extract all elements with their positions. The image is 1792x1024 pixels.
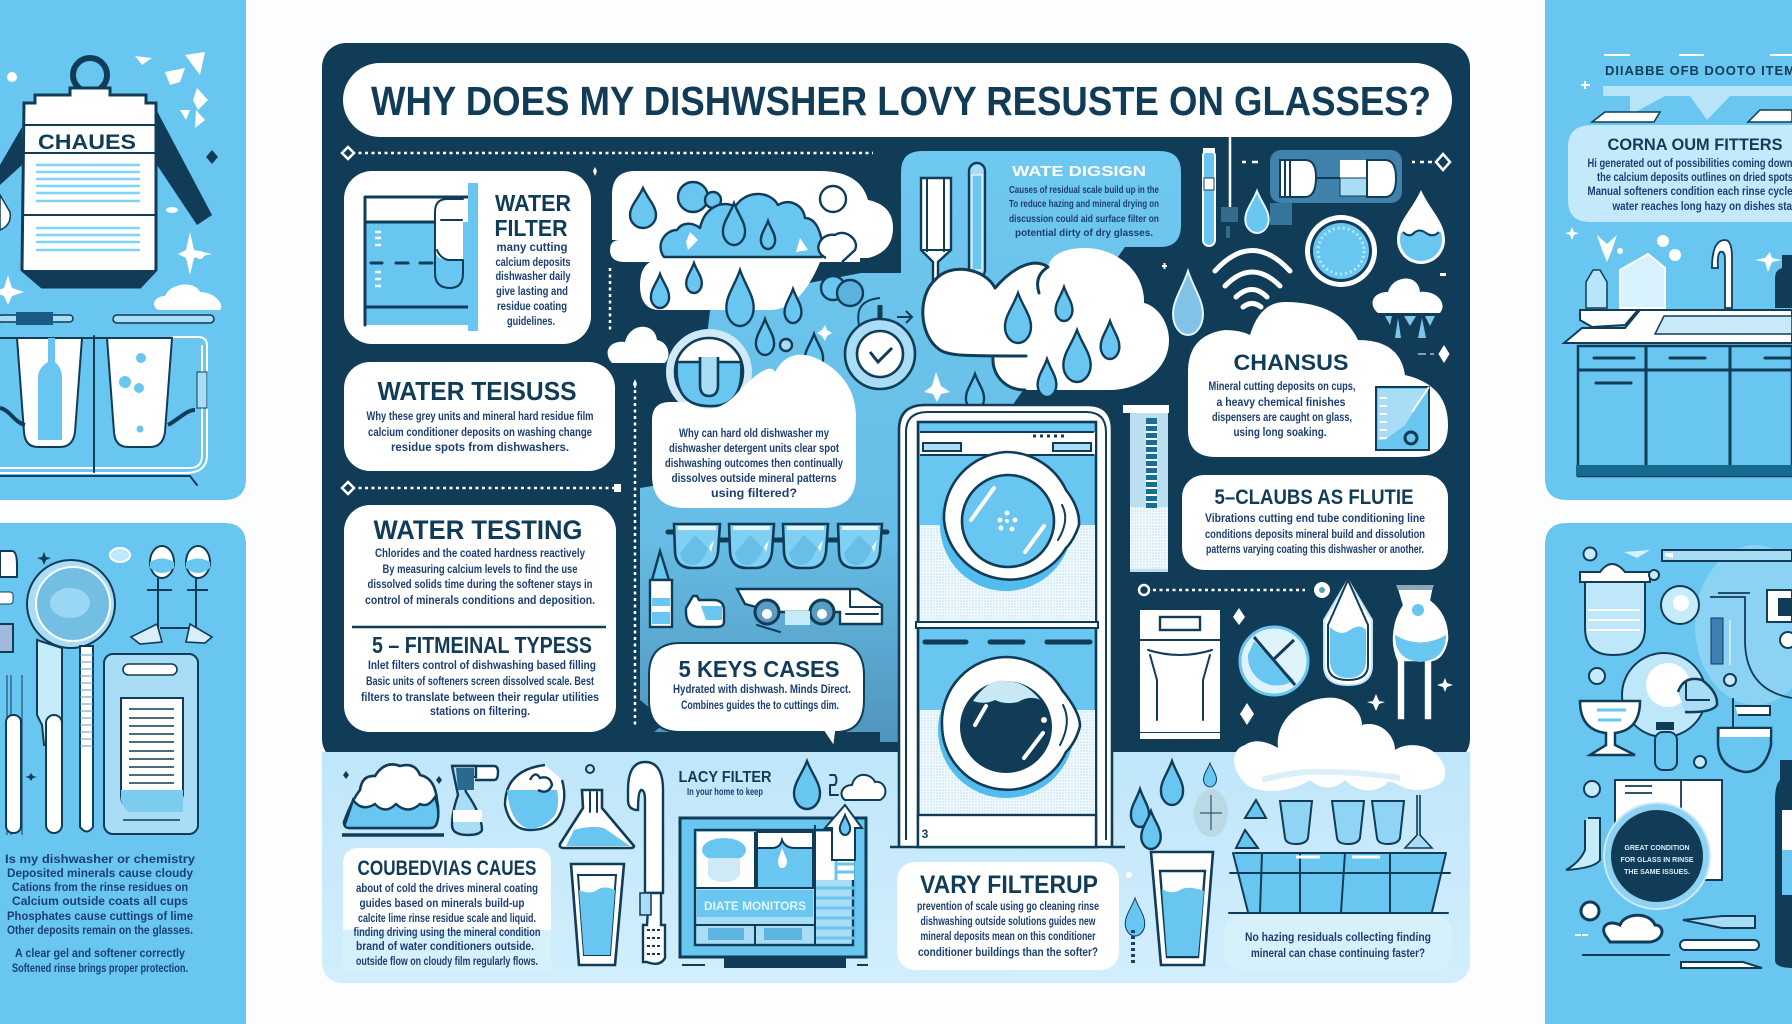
icon: small tap	[686, 596, 724, 627]
heading: chaues: CHAUES	[38, 131, 136, 154]
panel: chansus	[1188, 302, 1448, 457]
panel: vary filterup: prevention of scale using go cleaning rinse	[917, 901, 1099, 913]
icon: goggles	[110, 546, 212, 644]
panel: vary filterup: dishwashing outside solutions guides new	[920, 916, 1096, 928]
panel: 5 keys cases	[649, 643, 864, 747]
panel: water testing and types: dissolved solids time during the softener stays in	[368, 579, 592, 591]
panel: 5-clauses as flutie: conditions deposits mineral build and dissolution	[1205, 529, 1425, 541]
panel: rack note	[1224, 915, 1452, 970]
icon: hose unit box	[1270, 150, 1402, 225]
heading: water filter: FILTER	[494, 215, 568, 241]
panel: 5 keys cases: Combines guides the to cuttings dim.	[681, 700, 839, 712]
icon: bottle	[1775, 760, 1792, 968]
panel: 5-clauses as flutie: 5–CLAUBS AS FLUTIE	[1214, 486, 1414, 509]
panel: chansus: a heavy chemical finishes	[1216, 397, 1346, 409]
panel: question bubble: using filtered?	[711, 488, 797, 500]
icon: loose drops	[1125, 761, 1216, 936]
icon: sparkles lower right	[1233, 608, 1453, 725]
icon: small bottle	[650, 551, 672, 627]
panel: courbedias caues: outside flow on cloudy film regularly flows.	[356, 956, 538, 968]
icon: filter jug	[1580, 548, 1659, 655]
decorative sparkles	[0, 52, 212, 305]
panel: right bottom side card	[1545, 523, 1792, 1024]
icon: hanging ring	[73, 58, 107, 92]
icon: shelf funnels	[1592, 86, 1792, 122]
icon: sleeves behind clipboard	[0, 111, 212, 225]
panel: water design: Causes of residual scale build up in the	[1009, 184, 1159, 196]
panel: 5-clauses as flutie: patterns varying coating this dishwasher or another.	[1206, 544, 1424, 556]
heading: water filter: WATER	[495, 190, 571, 216]
text block: left explanation: Deposited minerals cause cloudy	[7, 868, 194, 880]
text block: left explanation: Softened rinse brings proper protection.	[12, 963, 188, 975]
panel: water teisuss: WATER TEISUSS	[378, 376, 576, 406]
icon: stemmed bowl	[1580, 701, 1640, 755]
panel: question bubble: dishwashing outcomes then continually	[665, 458, 843, 470]
monitor dashboard: DIATE MONITORS	[704, 899, 806, 913]
icon: filter tank	[365, 183, 478, 331]
panel: courbedias caues: guides based on minerals build-up	[360, 898, 524, 910]
icon: round flask on stand	[1392, 585, 1449, 720]
icon: small drop and sparkle	[924, 372, 984, 410]
icon: small white cloud	[608, 327, 668, 363]
heading: top label row: DIIABBE OFB DOOTO ITEM	[1605, 63, 1792, 78]
text block: left explanation: A clear gel and softener correctly	[15, 948, 186, 960]
text block: left explanation: Calcium outside coats all cups	[12, 896, 188, 908]
panel: question bubble: dishwasher detergent units clear spot	[669, 443, 839, 455]
panel: question bubble: Why can hard old dishwasher my	[679, 428, 829, 440]
connector: middle dotted line	[342, 482, 621, 494]
clipboard: causes card	[22, 88, 156, 287]
icon: pipe unit	[1710, 590, 1792, 698]
icon: rain cloud	[1373, 273, 1446, 338]
icon: test tube and rod	[1203, 137, 1238, 246]
washer: lower panel: 3	[922, 827, 929, 841]
icon: timer check	[845, 298, 915, 389]
panel: chansus: CHANSUS	[1234, 350, 1348, 375]
icon: hook	[1566, 818, 1600, 870]
text block: left explanation	[5, 854, 196, 975]
icon: pale drop	[1173, 271, 1203, 335]
panel: courbedias caues: calcite lime rinse residue scale and liquid.	[358, 913, 536, 925]
panel: water design: discussion could aid surface filter on	[1009, 213, 1159, 225]
text block: dishwasher daily	[496, 271, 571, 283]
panel: vary filterup: mineral deposits mean on this conditioner	[920, 931, 1096, 943]
icon: no-entry dial	[1240, 627, 1308, 695]
text block: many cutting	[496, 242, 568, 254]
heading: lacy filter	[678, 769, 772, 798]
panel: vary filterup: VARY FILTERUP	[920, 871, 1098, 899]
panel: 5 keys cases: 5 KEYS CASES	[678, 656, 840, 682]
icon: spray bottle	[452, 766, 498, 835]
heading: lacy filter: LACY FILTER	[678, 769, 772, 786]
text block	[496, 242, 571, 328]
panel: water design: WATE DIGSIGN	[1012, 163, 1146, 180]
icon: large water drop	[1397, 190, 1445, 264]
panel: water testing and types: Basic units of softeners screen dissolved scale. Best	[366, 676, 594, 688]
icon: flask	[560, 765, 634, 848]
panel: water teisuss: calcium conditioner deposits on washing change	[368, 427, 592, 439]
icon: dispenser tube	[921, 163, 985, 300]
panel: courbedias caues: finding driving using the mineral condition	[354, 927, 540, 939]
icon: diamond marker	[1436, 154, 1450, 170]
title bar	[343, 63, 1452, 137]
panel: corna oum fitters: CORNA OUM FITTERS	[1608, 135, 1782, 154]
callout: dark circle note	[1604, 803, 1710, 909]
panel: chansus: Mineral cutting deposits on cups,	[1208, 381, 1356, 393]
icon: vial	[1194, 789, 1266, 848]
icon: big cloud with drops	[923, 248, 1169, 397]
icon: blue cloud	[661, 182, 856, 262]
text block: left explanation: Is my dishwasher or chemistry	[5, 854, 196, 866]
callout: dark circle note: GREAT CONDITION	[1624, 845, 1690, 852]
text block: guidelines.	[507, 316, 555, 328]
icon: drop and cloud above monitor	[794, 761, 885, 809]
panel: courbedias caues: COUBEDVIAS CAUES	[358, 857, 536, 880]
panel: cloud with drops	[610, 171, 893, 370]
icon: sink and cabinets	[1564, 240, 1792, 476]
heading: water filter	[494, 190, 571, 241]
connector: top dotted line	[342, 147, 873, 176]
panel: left bottom side card	[0, 523, 246, 1024]
icon: tanker truck	[737, 589, 882, 632]
heading: lacy filter: In your home to keep	[687, 787, 763, 798]
icon: water basin	[1718, 698, 1771, 772]
icon: pipe rod	[1624, 550, 1792, 561]
central blue area	[640, 151, 1181, 752]
washer outer frame	[899, 405, 1112, 847]
icon: small cloud	[154, 284, 221, 310]
icon: washer ring	[1661, 586, 1699, 624]
monitor dashboard	[680, 805, 868, 967]
connector: vertical dotted lines	[610, 268, 637, 727]
text block: calcium deposits	[496, 257, 570, 269]
heading: filter types: 5 – FITMEINAL TYPESS	[372, 632, 592, 658]
icon: rack glasses	[1280, 795, 1432, 848]
panel: corna oum fitters	[1568, 125, 1792, 222]
connector: lower right dotted	[1139, 582, 1330, 598]
callout: dark circle note: FOR GLASS IN RINSE	[1620, 857, 1694, 864]
icon: gauge lens	[666, 329, 752, 415]
panel: water testing and types: control of minerals conditions and deposition.	[365, 595, 595, 607]
text block: give lasting and	[496, 286, 568, 298]
text block: residue coating	[497, 301, 567, 313]
icon: bottom-right cloud	[1234, 698, 1445, 791]
panel: water teisuss: residue spots from dishwashers.	[391, 442, 569, 454]
icon: test chart	[1376, 387, 1429, 450]
panel: water design	[921, 163, 1159, 300]
title bar: WHY DOES MY DISHWSHER LOVY RESUSTE ON GLASSES?	[371, 78, 1431, 124]
panel: water testing and types: filters to translate between their regular utilities	[361, 692, 599, 704]
panel: courbedias caues: about of cold the drives mineral coating	[356, 883, 538, 895]
panel: chansus: dispensers are caught on glass,	[1212, 412, 1352, 424]
panel: question bubble	[652, 355, 856, 508]
panel: water design: potential dirty of dry glasses.	[1015, 227, 1153, 239]
panel: chansus: using long soaking.	[1234, 427, 1326, 439]
washer stack	[890, 405, 1125, 847]
icon: document	[1615, 780, 1722, 880]
washer: control band	[920, 432, 1095, 455]
washer: upper door	[940, 452, 1079, 591]
text block: left explanation: Phosphates cause cuttings of lime	[7, 911, 193, 923]
icon: funnel drop	[1324, 580, 1372, 685]
icon: drop	[1245, 191, 1269, 233]
panel: water design: To reduce hazing and mineral drying on	[1009, 198, 1159, 210]
panel: water teisuss: Why these grey units and mineral hard residue film	[366, 411, 594, 423]
icon: clipboard with list	[104, 654, 198, 834]
icon: wifi arcs	[1215, 250, 1290, 307]
icon: dish rack	[1229, 852, 1450, 913]
panel: courbedias caues	[343, 848, 551, 970]
panel background: light lower band	[322, 752, 1470, 983]
panel: question bubble: dissolves outside mineral patterns	[672, 473, 836, 485]
icon: round gauge	[1305, 215, 1377, 287]
callout: dark circle note: THE SAME ISSUES.	[1624, 869, 1690, 876]
panel background: dark	[322, 43, 1470, 763]
icon: filter cups in frame	[0, 336, 207, 485]
icon: rods	[0, 312, 214, 325]
icon: magnifier	[27, 560, 115, 833]
icon: packet	[1140, 610, 1220, 739]
main poster panel	[322, 43, 1470, 983]
icon: tools and cloud	[1575, 902, 1762, 968]
panel: 5-clauses as flutie: Vibrations cutting end tube conditioning line	[1205, 513, 1425, 525]
icon: water bowl	[505, 765, 564, 830]
panel: rack note: No hazing residuals collecting finding	[1245, 932, 1431, 944]
panel: rack note: mineral can chase continuing faster?	[1251, 948, 1425, 960]
icon: sparkle	[1418, 346, 1449, 362]
icon: mound	[342, 764, 444, 835]
panel: water testing and types: Chlorides and the coated hardness reactively	[375, 548, 586, 560]
icon: cane brush	[628, 762, 665, 964]
icon: measuring tube	[1123, 405, 1169, 572]
icon: water glass	[571, 864, 624, 965]
icon: round flask with mug	[1622, 653, 1717, 770]
washer: lower door	[938, 657, 1080, 798]
panel: vary filterup: conditioner buildings than the softer?	[918, 947, 1098, 959]
icon: tools far left	[0, 551, 22, 835]
panel: water testing and types	[344, 505, 616, 732]
panel: water testing and types: By measuring calcium levels to find the use	[382, 564, 578, 576]
text block: left explanation: Cations from the rinse residues on	[12, 882, 188, 894]
panel: water teisuss	[344, 362, 615, 471]
panel: right top side card	[1545, 0, 1792, 500]
panel: water testing and types: stations on filtering.	[430, 706, 530, 718]
panel: left top side card	[0, 0, 246, 500]
panel: 5-clauses as flutie	[1182, 475, 1448, 570]
panel: vary filterup	[897, 862, 1119, 970]
icon: drops	[630, 188, 823, 370]
text block: left explanation: Other deposits remain on the glasses.	[7, 925, 193, 937]
washer: lower panel	[918, 642, 1096, 847]
icon: glasses row	[668, 524, 887, 568]
panel: courbedias caues: brand of water conditioners outside.	[356, 941, 534, 953]
icon: tall water glass	[1151, 852, 1213, 965]
heading: water testing: WATER TESTING	[374, 515, 582, 545]
panel: water filter	[344, 171, 591, 344]
panel: water testing and types: Inlet filters control of dishwashing based filling	[368, 660, 596, 672]
panel: 5 keys cases: Hydrated with dishwash. Minds Direct.	[673, 684, 851, 696]
